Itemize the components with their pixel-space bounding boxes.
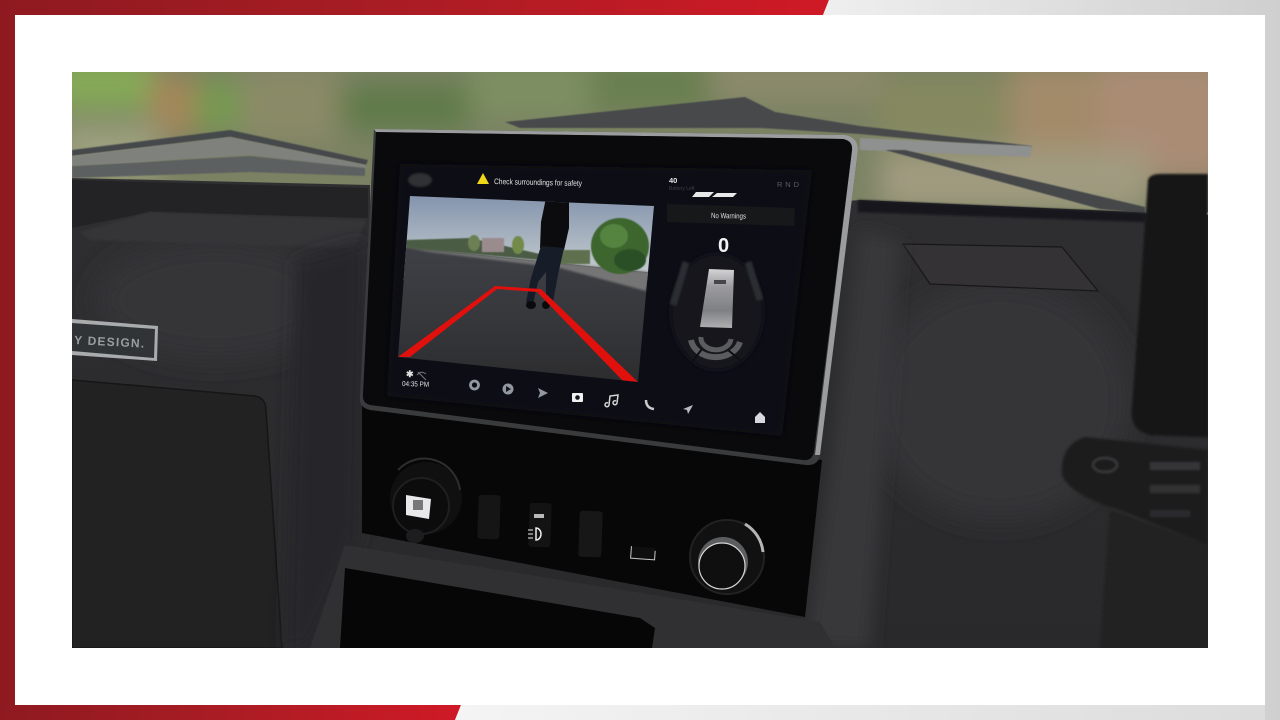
dash recess (903, 244, 1098, 291)
power socket (390, 459, 462, 543)
red guide lines (398, 286, 638, 382)
road (395, 247, 655, 385)
centre column (292, 244, 357, 364)
frame: red bottom bar (0, 705, 461, 720)
rear sensor arcs (691, 337, 740, 362)
warning triangle (477, 173, 489, 184)
usb port (631, 546, 655, 560)
warning message: Check surroundings for safety (494, 177, 582, 188)
top dash tray (72, 180, 368, 248)
touchscreen bezel (360, 129, 858, 465)
dark windshield edge (858, 200, 1145, 222)
bluetooth and wifi status (406, 369, 426, 380)
range value: 40 (669, 176, 677, 185)
distant treeline (406, 235, 590, 264)
photo: dashboard with touchscreen (50, 55, 1230, 648)
clock: 04:35 PM (402, 379, 429, 389)
icon: settings (470, 381, 478, 389)
blank switch left (477, 495, 501, 539)
standing person (526, 198, 569, 309)
frame: red top bar (0, 0, 829, 720)
frame: grey bottom bar (455, 705, 1265, 720)
icon: play (502, 384, 514, 394)
steering stalk (1062, 437, 1208, 648)
right column (805, 230, 900, 648)
far pavement (404, 247, 650, 291)
dashboard body (72, 178, 1208, 648)
faint corner logo (408, 173, 432, 187)
speed value: 0 (718, 235, 729, 257)
lower console (310, 545, 835, 648)
display background (387, 164, 812, 436)
icon: camera (572, 393, 583, 402)
icon: phone (646, 400, 654, 409)
bluetooth and wifi status: ✱ (406, 369, 414, 379)
tree (591, 218, 649, 274)
range caption: Battery Left (669, 186, 695, 192)
rotary knob (690, 520, 764, 594)
design badge (72, 319, 158, 361)
left dashboard highlight (112, 258, 286, 350)
gear selector: R N D (777, 180, 800, 189)
icon: music (605, 395, 618, 407)
wipers (72, 97, 1145, 213)
rear camera view (390, 190, 660, 385)
right dashboard highlight (892, 295, 1120, 514)
sky (404, 196, 654, 280)
frame: grey top bar (823, 0, 1280, 720)
glove box (72, 380, 282, 648)
right mount (1132, 174, 1208, 437)
no warnings box (667, 204, 795, 226)
parking sensor view (671, 254, 763, 370)
icon: drive arrow (538, 388, 548, 398)
design badge: Y DESIGN. (74, 333, 144, 351)
no warnings box: No Warnings (711, 211, 746, 221)
blank switch right (578, 511, 603, 557)
vehicle (700, 269, 734, 328)
foliage through windshield (72, 72, 1208, 212)
drive bars (692, 192, 737, 197)
control panel (362, 400, 822, 617)
fog light switch (528, 503, 552, 547)
left knob (67, 388, 97, 434)
icon: home (755, 412, 765, 423)
icon: navigation (683, 405, 693, 414)
